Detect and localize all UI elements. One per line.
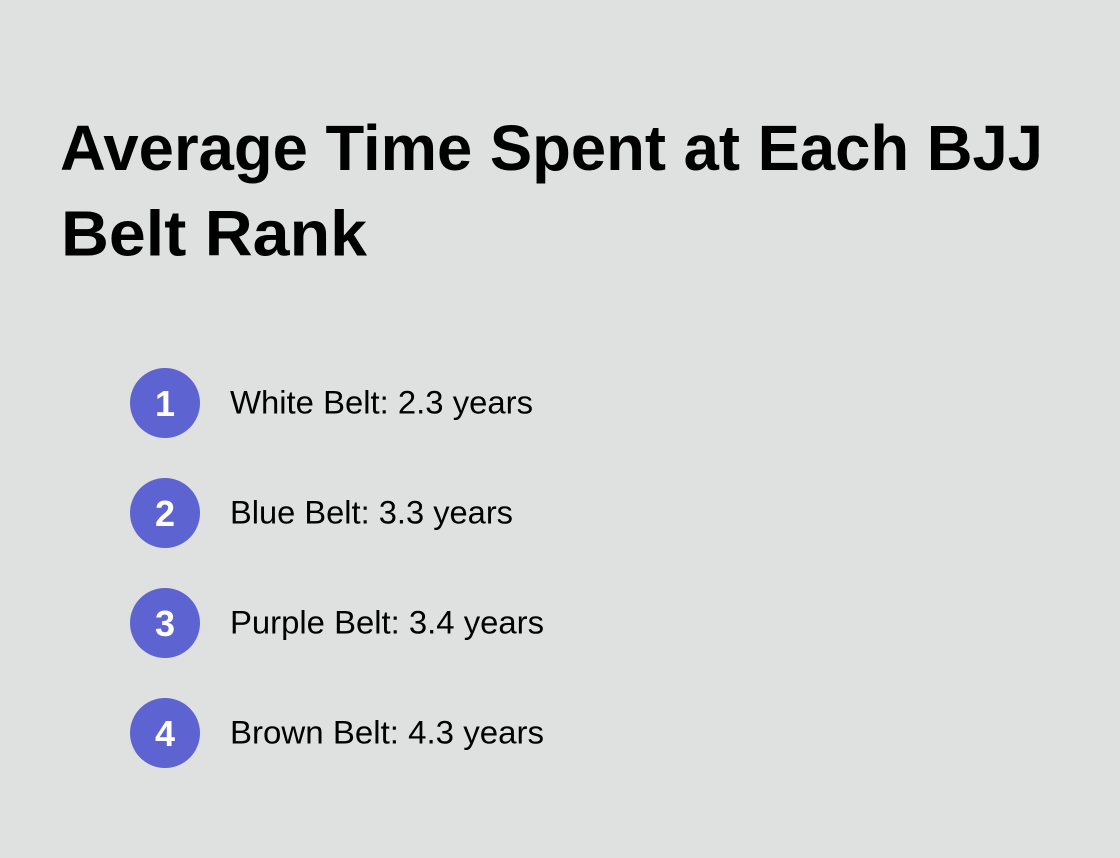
list of belt ranks [130,368,544,768]
title: Average Time Spent at Each BJJ [60,112,1043,184]
title: Belt Rank [61,198,367,270]
list item 4: brown belt: Brown Belt: 4.3 years [230,714,544,750]
list item 1: white belt: White Belt: 2.3 years [230,384,533,420]
list item 2: blue belt [130,478,513,548]
list item 4: brown belt [130,698,544,768]
list item 1: white belt [130,368,533,438]
list item 2: blue belt: Blue Belt: 3.3 years [230,494,513,530]
list item 4: brown belt: 4 [155,713,175,754]
list item 3: purple belt: Purple Belt: 3.4 years [230,604,544,640]
list item 1: white belt: 1 [155,383,175,424]
title [60,112,1043,270]
list item 3: purple belt [130,588,544,658]
list item 2: blue belt: 2 [155,493,175,534]
list item 3: purple belt: 3 [155,603,175,644]
